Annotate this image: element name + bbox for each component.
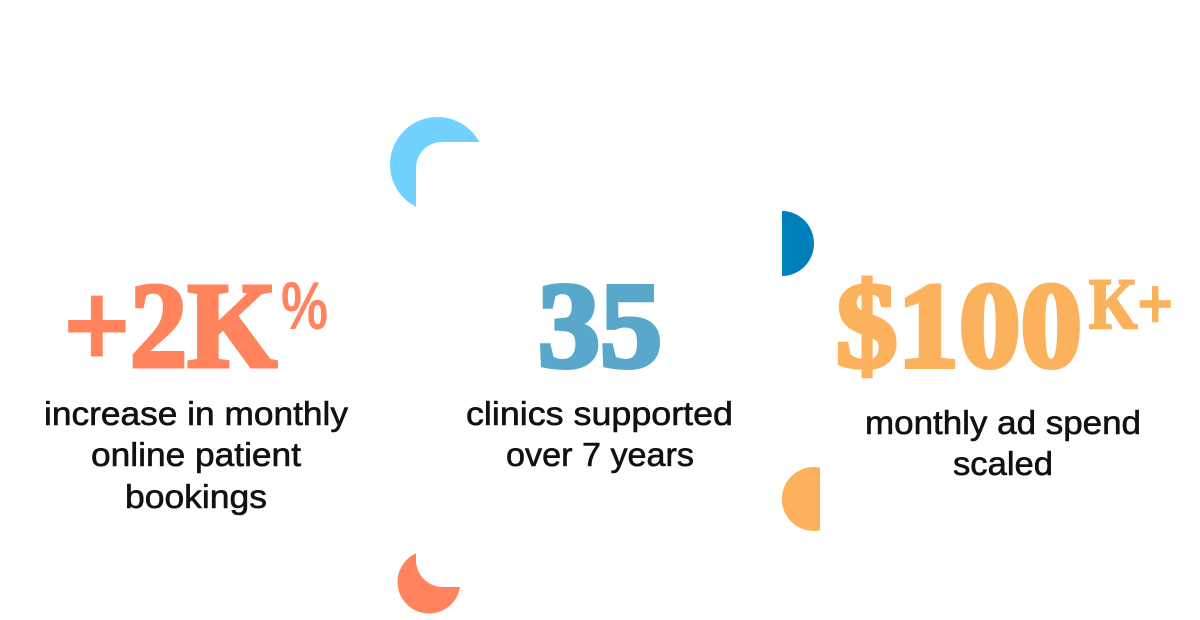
icon: orange half circle xyxy=(782,467,820,531)
stat: 35: 35 xyxy=(538,258,662,394)
description: online bookings: bookings xyxy=(125,478,267,515)
icon: coral crescent xyxy=(398,540,470,614)
panel: online bookings stat xyxy=(44,258,349,515)
icon: light blue arc xyxy=(390,117,490,215)
description: clinics: over 7 years xyxy=(506,436,694,473)
description: ad spend: scaled xyxy=(953,445,1053,482)
description: ad spend: monthly ad spend xyxy=(865,404,1141,441)
icon: dark blue half circle xyxy=(782,211,814,276)
panel: ad spend stat xyxy=(836,258,1173,482)
panel: clinics stat xyxy=(466,258,733,473)
description: online bookings: online patient xyxy=(91,436,301,473)
stat: +2K%: +2K xyxy=(64,258,277,394)
description: ad spend xyxy=(865,404,1141,482)
stat: +2K%: % xyxy=(281,268,328,344)
stat: $100K+: K+ xyxy=(1089,264,1173,344)
stat: $100K+: $100 xyxy=(836,258,1082,394)
description: online bookings: increase in monthly xyxy=(44,395,349,432)
description: clinics: clinics supported xyxy=(466,395,733,432)
description: clinics xyxy=(466,395,733,473)
description: online bookings xyxy=(44,395,349,515)
